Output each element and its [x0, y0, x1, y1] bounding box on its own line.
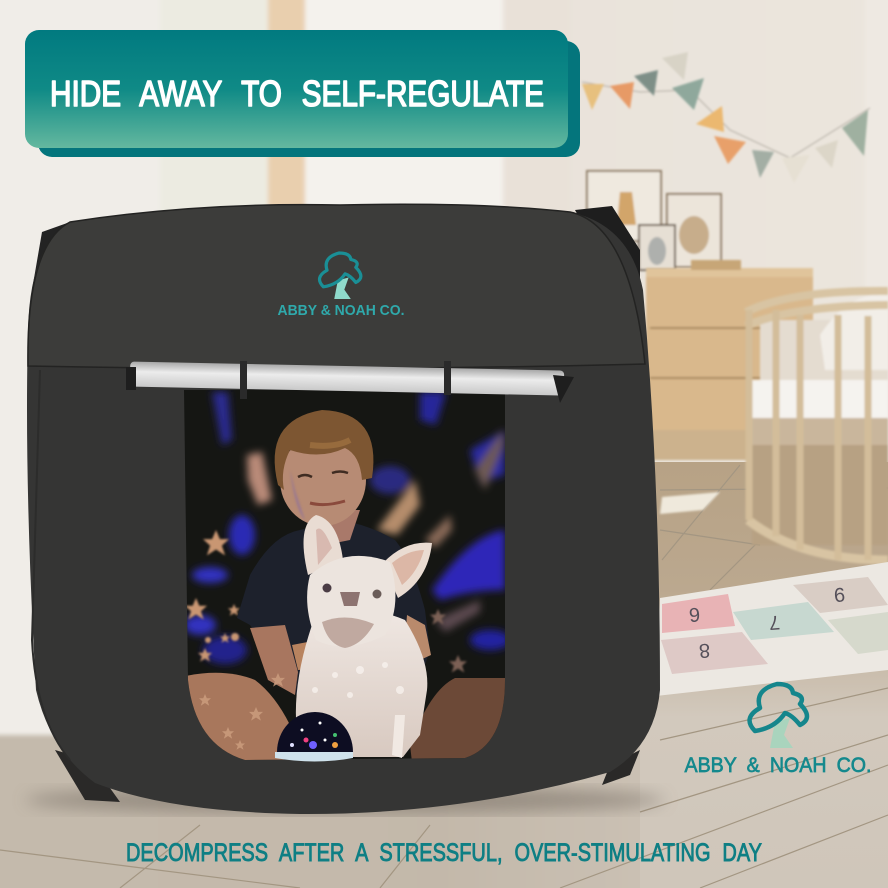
- floor mat with numbers: 8: [698, 639, 711, 661]
- background: wooden floor: [0, 462, 888, 888]
- brand logo bottom right: [684, 684, 872, 777]
- wall pictures: [587, 171, 721, 270]
- pop-up sensory tent: [25, 204, 665, 814]
- star projector lamp: [275, 712, 353, 762]
- brand logo bottom right: ABBY & NOAH CO.: [684, 754, 872, 777]
- tent top panel: [28, 204, 645, 369]
- dresser: [646, 260, 813, 460]
- tent logo: [278, 253, 404, 319]
- floor mat with numbers: 6: [688, 603, 701, 625]
- floor mat with numbers: 7: [768, 611, 781, 633]
- tent door opening with starry light: [184, 390, 510, 762]
- tent logo: ABBY & NOAH CO.: [278, 302, 404, 319]
- logo tree icon: [750, 684, 807, 748]
- banner heading: [25, 30, 580, 157]
- French bulldog: [296, 515, 432, 758]
- garland bunting: [582, 52, 870, 183]
- rolled door flap: [126, 361, 574, 403]
- seated legs with star light: [186, 673, 507, 762]
- wooden crib: [746, 291, 888, 560]
- boy: [237, 410, 431, 700]
- floor mat with numbers: [656, 562, 888, 696]
- banner heading: HIDE AWAY TO SELF-REGULATE: [50, 73, 544, 114]
- floor mat with numbers: 9: [833, 583, 846, 605]
